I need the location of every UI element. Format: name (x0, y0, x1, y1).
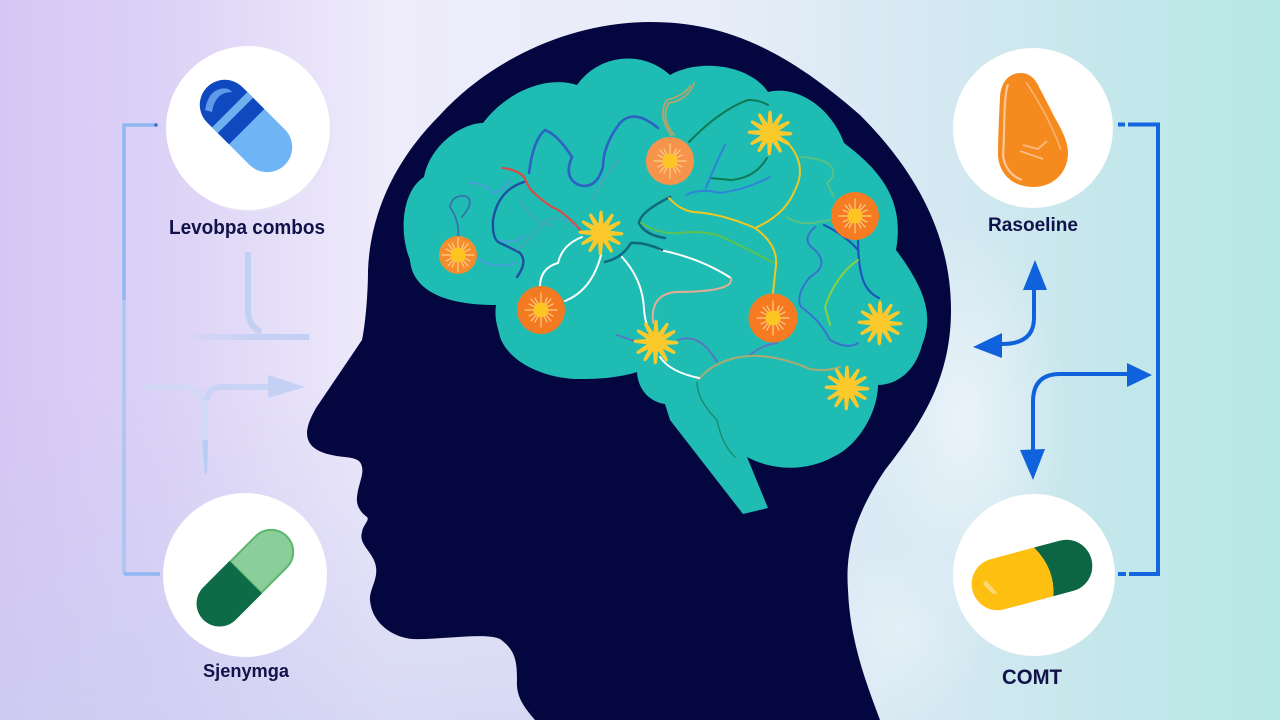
brain (404, 58, 927, 514)
label: COMT (1002, 666, 1062, 689)
pathway: right cluster (786, 157, 834, 223)
left bracket connector (124, 123, 160, 574)
pathway: small loop (450, 196, 470, 237)
pathway: dark green (689, 100, 768, 180)
medication card: Rasbeline (953, 48, 1113, 236)
pathway: white lower (660, 357, 699, 378)
pathway: blue wavy right (799, 227, 858, 346)
pathway: yellow (669, 142, 800, 293)
icon: green capsule (187, 520, 303, 636)
label: Rasoeline (988, 214, 1078, 236)
right bracket connector (1118, 124, 1158, 574)
arrow: up and left (973, 260, 1047, 358)
pathway: peach (653, 278, 731, 323)
pathway: dark blue left loop (493, 182, 524, 277)
pathway: blue midline (686, 145, 770, 195)
pathway: dark teal (605, 197, 670, 262)
pathway: red (503, 168, 582, 232)
label: Sjenymga (203, 661, 290, 681)
icon: orange tablet (998, 73, 1068, 187)
pathway: light blue (469, 180, 525, 265)
pathway: blue right (824, 225, 879, 298)
icon: blue striped capsule (189, 69, 303, 183)
head silhouette (307, 22, 951, 720)
medication card: COMT (953, 494, 1115, 689)
faint arrow: branching right and down (143, 375, 305, 475)
pathway: white links (540, 237, 731, 343)
icon: yellow and green capsule (966, 534, 1098, 616)
arrow: right and down (1020, 363, 1152, 480)
pathway: green stem (697, 382, 735, 457)
pathway: teal faint (517, 160, 620, 250)
medication card: Sjenymga (163, 493, 327, 681)
pathway: green (641, 223, 774, 263)
pathway: swirl above neuron (663, 83, 694, 135)
pathway: lime (825, 260, 858, 325)
faint arrow: L-shaped connector (193, 252, 309, 337)
pathway: blue wavy upper left (529, 117, 658, 186)
pathway: lower links (617, 335, 777, 362)
neural pathways (450, 83, 879, 457)
neurons: yellow stars (578, 110, 903, 411)
medication card: Levodopa combos (166, 46, 332, 239)
neurons: orange cell bodies (439, 137, 879, 342)
pathway: yellow to grey arc (699, 356, 840, 379)
label: Levobpa combos (169, 217, 325, 239)
